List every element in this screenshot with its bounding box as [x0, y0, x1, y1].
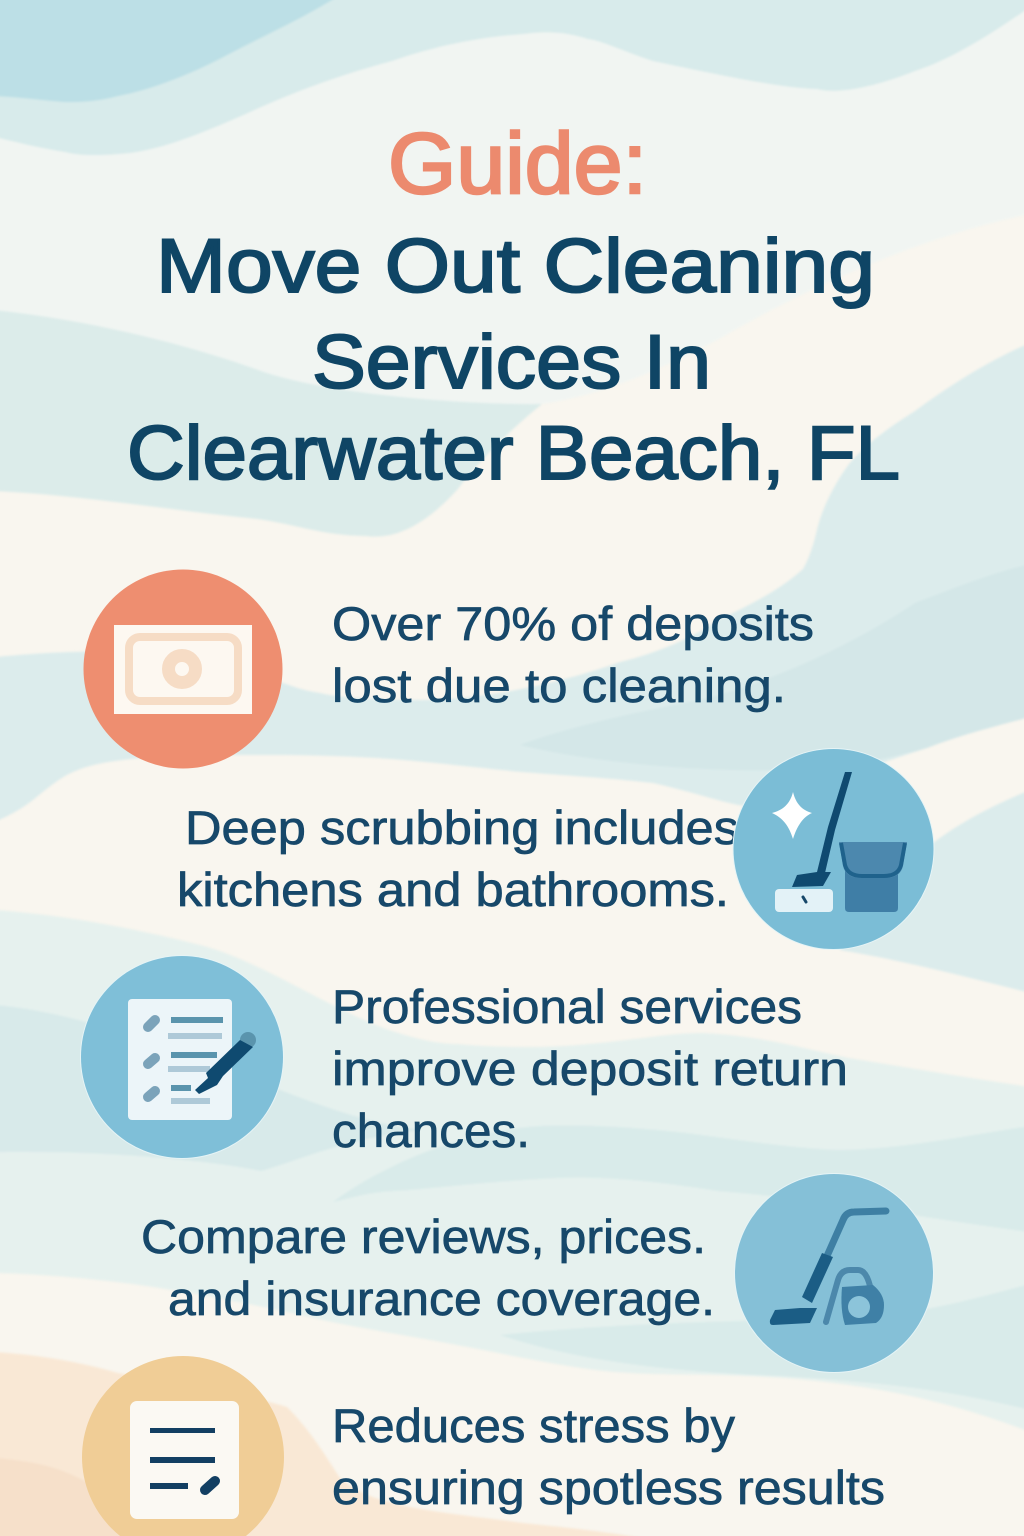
text: professional: [332, 980, 848, 1157]
text: deposits: [332, 597, 814, 712]
text: stress: Reduces stress by: [332, 1399, 736, 1452]
title line: Services In: Services In: [312, 320, 711, 405]
text: scrubbing: kitchens and bathrooms.: [177, 863, 729, 916]
icon: dollar bill: [84, 570, 282, 768]
item 3: professional: [80, 955, 848, 1159]
text: stress: [332, 1399, 885, 1514]
text: compare: [141, 1210, 715, 1325]
text: compare: and insurance coverage.: [168, 1272, 715, 1325]
text: scrubbing: Deep scrubbing includes: [185, 801, 739, 854]
icon: mop and bucket: [732, 748, 934, 950]
icon: checklist and pen: [80, 955, 284, 1159]
item 2: scrubbing: [177, 748, 934, 950]
item 5: stress: [82, 1356, 885, 1536]
title line: Guide: Guide:: [388, 116, 647, 212]
title line: Clearwater Beach, FL: Clearwater Beach, FL: [127, 411, 900, 496]
item 4: compare: [141, 1173, 934, 1373]
text: deposits: lost due to cleaning.: [332, 659, 786, 712]
title line: Move Out Cleaning: Move Out Cleaning: [156, 224, 875, 309]
text: professional: chances.: [332, 1104, 530, 1157]
text: professional: improve deposit return: [332, 1042, 848, 1095]
icon: vacuum cleaner: [734, 1173, 934, 1373]
title: [127, 116, 900, 496]
text: stress: ensuring spotless results: [332, 1461, 885, 1514]
text: deposits: Over 70% of deposits: [332, 597, 814, 650]
text: professional: Professional services: [332, 980, 802, 1033]
icon: note: [82, 1356, 284, 1536]
item 1: deposits: [84, 570, 814, 768]
text: scrubbing: [177, 801, 739, 916]
text: compare: Compare reviews, prices.: [141, 1210, 706, 1263]
